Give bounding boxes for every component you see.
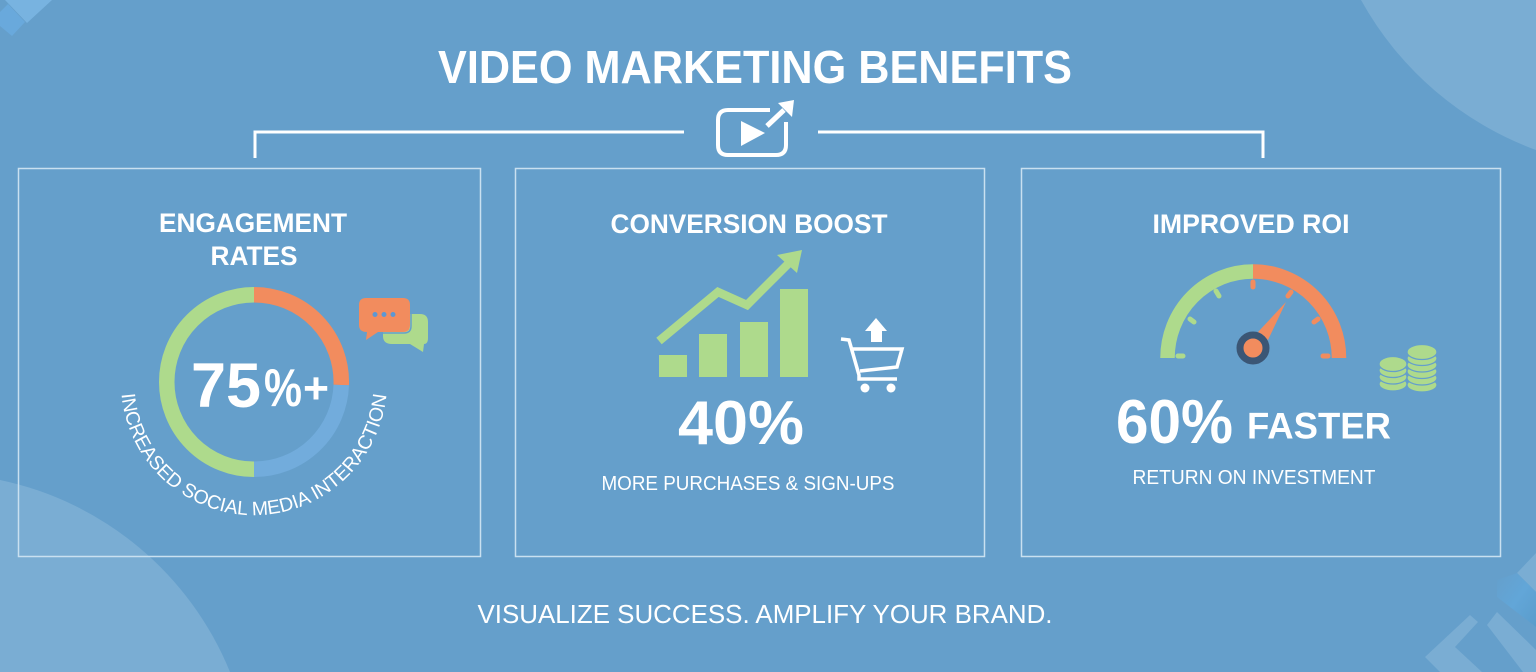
stat: 60% faster: 60% <box>1116 388 1233 457</box>
panel: improved ROI <box>1022 168 1500 556</box>
heading: conversion boost: CONVERSION BOOST <box>610 209 888 239</box>
stat: 75%+: 75 <box>191 351 261 421</box>
panel: engagement rates <box>18 168 482 558</box>
stat: 60% faster: FASTER <box>1247 406 1391 446</box>
stat: 60% faster <box>1116 388 1391 457</box>
stat: 75%+: + <box>303 364 329 413</box>
heading: engagement rates <box>159 208 347 271</box>
trend arrow <box>659 250 802 341</box>
icon: video with growth arrow <box>718 100 794 155</box>
icon: coin stacks <box>1379 344 1437 392</box>
caption: RETURN ON INVESTMENT <box>1132 467 1376 489</box>
tagline: VISUALIZE SUCCESS. AMPLIFY YOUR BRAND. <box>478 599 1052 629</box>
icon: shopping cart <box>841 318 902 392</box>
heading: improved ROI: IMPROVED ROI <box>1152 209 1350 239</box>
bracket connector <box>255 132 1263 158</box>
caption: MORE PURCHASES & SIGN-UPS <box>602 473 894 495</box>
heading: engagement rates: ENGAGEMENT <box>159 208 347 238</box>
icon: chat bubbles <box>359 298 428 352</box>
heading: engagement rates: RATES <box>210 241 298 271</box>
stat: 75%+: % <box>264 359 302 418</box>
stat: 40%: 40% <box>678 389 804 458</box>
title: VIDEO MARKETING BENEFITS <box>438 41 1072 93</box>
gauge <box>1168 272 1339 361</box>
curved caption: INCREASED SOCIAL MEDIA INTERACTION <box>122 394 386 516</box>
bar chart <box>659 289 808 377</box>
stat: 75%+ <box>191 351 329 421</box>
panel: conversion boost <box>516 168 984 556</box>
donut chart <box>167 295 341 469</box>
